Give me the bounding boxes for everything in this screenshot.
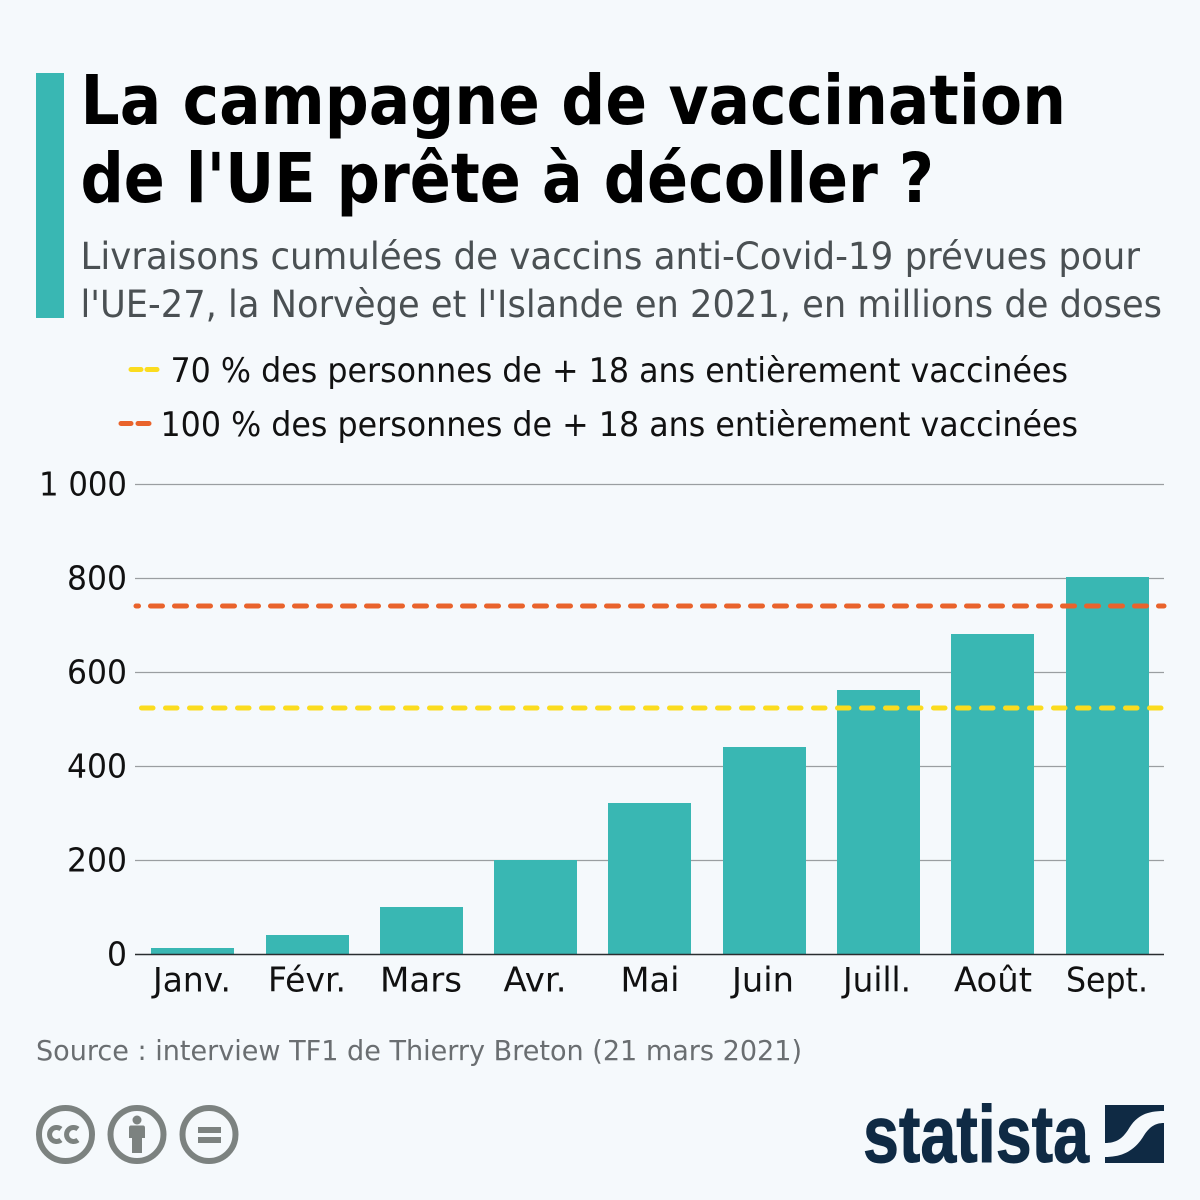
- x axis labels: Avr.: [504, 960, 566, 1000]
- x axis labels: Mai: [620, 960, 680, 1000]
- x axis labels: Janv.: [151, 960, 231, 1000]
- y axis labels: 600: [67, 652, 127, 692]
- legend item: 100 %: 100 % des personnes de + 18 ans entièrement vaccinées: [160, 405, 1078, 444]
- bar chart: [39, 464, 1164, 1000]
- x axis labels: Sept.: [1066, 960, 1148, 1000]
- title: La campagne de vaccination: [80, 61, 1066, 141]
- statista logo: [863, 1090, 1164, 1180]
- icon: creative commons: [39, 1108, 92, 1161]
- x axis labels: Août: [954, 960, 1032, 1000]
- title: [80, 61, 1066, 219]
- x axis labels: Mars: [380, 960, 462, 1000]
- icon: no derivatives: [182, 1108, 236, 1161]
- y axis labels: 400: [67, 746, 127, 786]
- subtitle: Livraisons cumulées de vaccins anti-Covid-19 prévues pour: [80, 235, 1141, 278]
- y axis labels: 1 000: [39, 464, 127, 504]
- x axis labels: Juin: [730, 960, 794, 1000]
- x axis labels: Juill.: [841, 960, 911, 1000]
- y axis labels: 800: [67, 558, 127, 598]
- title: de l'UE prête à décoller ?: [80, 139, 934, 219]
- reference line: 100 % vaccinated: [136, 604, 1164, 608]
- grid lines: [135, 484, 1164, 860]
- x axis labels: Févr.: [268, 960, 346, 1000]
- source: Source : interview TF1 de Thierry Breton (21 mars 2021): [36, 1034, 802, 1067]
- subtitle: l'UE-27, la Norvège et l'Islande en 2021, en millions de doses: [80, 283, 1162, 326]
- logo mark: [1105, 1105, 1164, 1163]
- title accent bar: [36, 73, 64, 318]
- x axis line: [135, 954, 1164, 956]
- logo wordmark: statista: [863, 1090, 1090, 1180]
- bars: [151, 577, 1149, 954]
- y axis labels: 200: [67, 840, 127, 880]
- y axis labels: 0: [107, 934, 127, 974]
- y axis labels: [39, 464, 127, 974]
- subtitle: [80, 235, 1162, 326]
- legend: [121, 351, 1078, 444]
- legend item: 70 %: 70 % des personnes de + 18 ans entièrement vaccinées: [170, 351, 1068, 390]
- x axis labels: [151, 960, 1148, 1000]
- icon: attribution: [110, 1108, 164, 1161]
- reference line: 70 % vaccinated: [140, 706, 1163, 710]
